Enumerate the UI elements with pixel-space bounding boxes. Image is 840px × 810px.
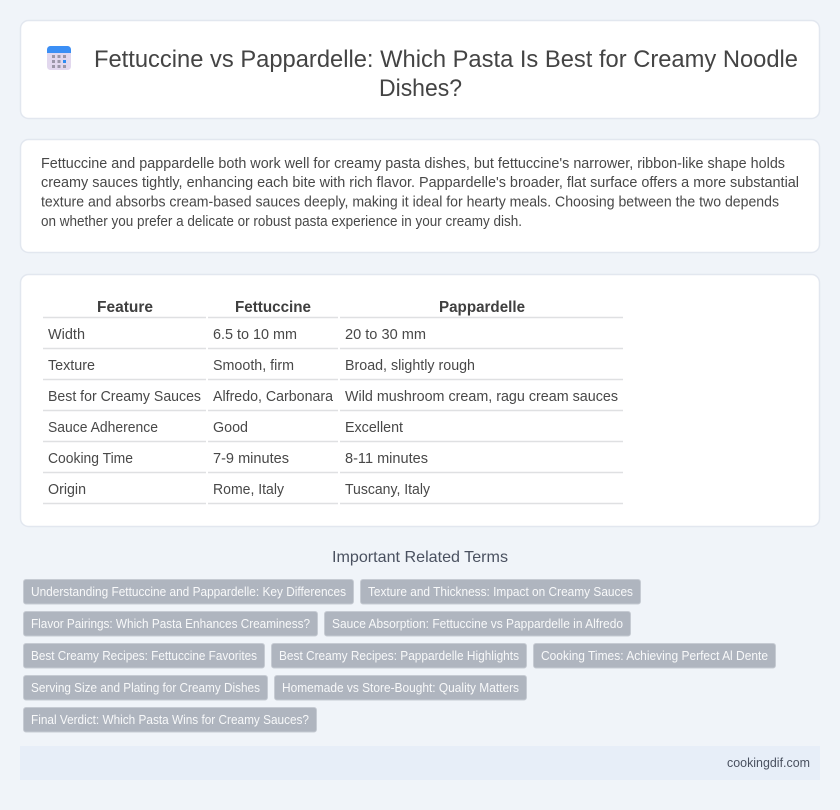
description text: texture and absorbs cream-based sauces deeply, making it ideal for hearty meals. Choosing between the two depends [41, 194, 779, 210]
row: texture: Smooth, firm [213, 358, 294, 374]
row: width [48, 327, 426, 343]
tag: Homemade vs Store-Bought: Quality Matters [282, 681, 519, 695]
tag [534, 644, 776, 668]
row: origin: Tuscany, Italy [345, 482, 431, 498]
tag [24, 708, 316, 732]
row: texture [48, 358, 475, 374]
tag [24, 580, 354, 604]
tag: Serving Size and Plating for Creamy Dishes [31, 681, 260, 695]
title: Fettuccine vs Pappardelle: Which Pasta Is Best for Creamy Noodle [94, 46, 798, 73]
description text: Fettuccine and pappardelle both work well for creamy pasta dishes, but fettuccine's narrower, ribbon-like shape holds [41, 156, 785, 172]
row: best for creamy sauces: Wild mushroom cream, ragu cream sauces [345, 389, 618, 405]
description text: on whether you prefer a delicate or robust pasta experience in your creamy dish. [41, 214, 522, 230]
tag: Understanding Fettuccine and Pappardelle: Key Differences [31, 585, 346, 599]
icon: calendar [47, 46, 71, 70]
row: sauce adherence: Sauce Adherence [48, 420, 158, 436]
row: width: 20 to 30 mm [345, 327, 426, 343]
row: best for creamy sauces: Best for Creamy Sauces [48, 389, 201, 405]
row: texture: Broad, slightly rough [345, 358, 475, 374]
row: cooking time: Cooking Time [48, 451, 133, 467]
row: origin: Rome, Italy [213, 482, 285, 498]
footer [20, 746, 820, 780]
tag: Best Creamy Recipes: Pappardelle Highlights [279, 649, 519, 663]
tag: Texture and Thickness: Impact on Creamy Sauces [368, 585, 633, 599]
tag: Best Creamy Recipes: Fettuccine Favorites [31, 649, 257, 663]
description text: creamy sauces tightly, enhancing each bite with rich flavor. Pappardelle's broader, flat surface offers a more substantial [41, 175, 799, 191]
tag: Cooking Times: Achieving Perfect Al Dente [541, 649, 768, 663]
tag [24, 676, 268, 700]
row: best for creamy sauces [48, 389, 618, 405]
row: sauce adherence [48, 420, 403, 436]
row: sauce adherence: Good [213, 420, 248, 436]
row: best for creamy sauces: Alfredo, Carbonara [213, 389, 334, 405]
heading: related terms: Important Related Terms [332, 549, 508, 566]
tag [24, 612, 318, 636]
row: cooking time [48, 451, 428, 467]
description text [41, 156, 799, 230]
table header: Feature [97, 299, 153, 316]
row: texture: Texture [48, 358, 95, 374]
tag [272, 644, 526, 668]
panel: comparison table [20, 274, 820, 526]
related term tags [24, 580, 776, 732]
tag [24, 644, 264, 668]
table header: Fettuccine [235, 299, 311, 316]
title [94, 46, 798, 102]
tag [274, 676, 526, 700]
row: cooking time: 7-9 minutes [213, 451, 289, 467]
tag: Flavor Pairings: Which Pasta Enhances Creaminess? [31, 617, 310, 631]
title: Dishes? [379, 75, 462, 102]
row: width: 6.5 to 10 mm [213, 327, 297, 343]
tag [324, 612, 630, 636]
row: origin [48, 482, 431, 498]
table header: Pappardelle [439, 299, 525, 316]
tag: Final Verdict: Which Pasta Wins for Creamy Sauces? [31, 713, 309, 727]
footer: cookingdif.com [727, 756, 810, 770]
row: cooking time: 8-11 minutes [345, 451, 428, 467]
panel: description [20, 140, 820, 252]
panel: header [20, 20, 820, 118]
table header [97, 299, 525, 316]
row: sauce adherence: Excellent [345, 420, 403, 436]
tag [360, 580, 640, 604]
row: width: Width [48, 327, 85, 343]
row: origin: Origin [48, 482, 86, 498]
tag: Sauce Absorption: Fettuccine vs Pappardelle in Alfredo [332, 617, 623, 631]
